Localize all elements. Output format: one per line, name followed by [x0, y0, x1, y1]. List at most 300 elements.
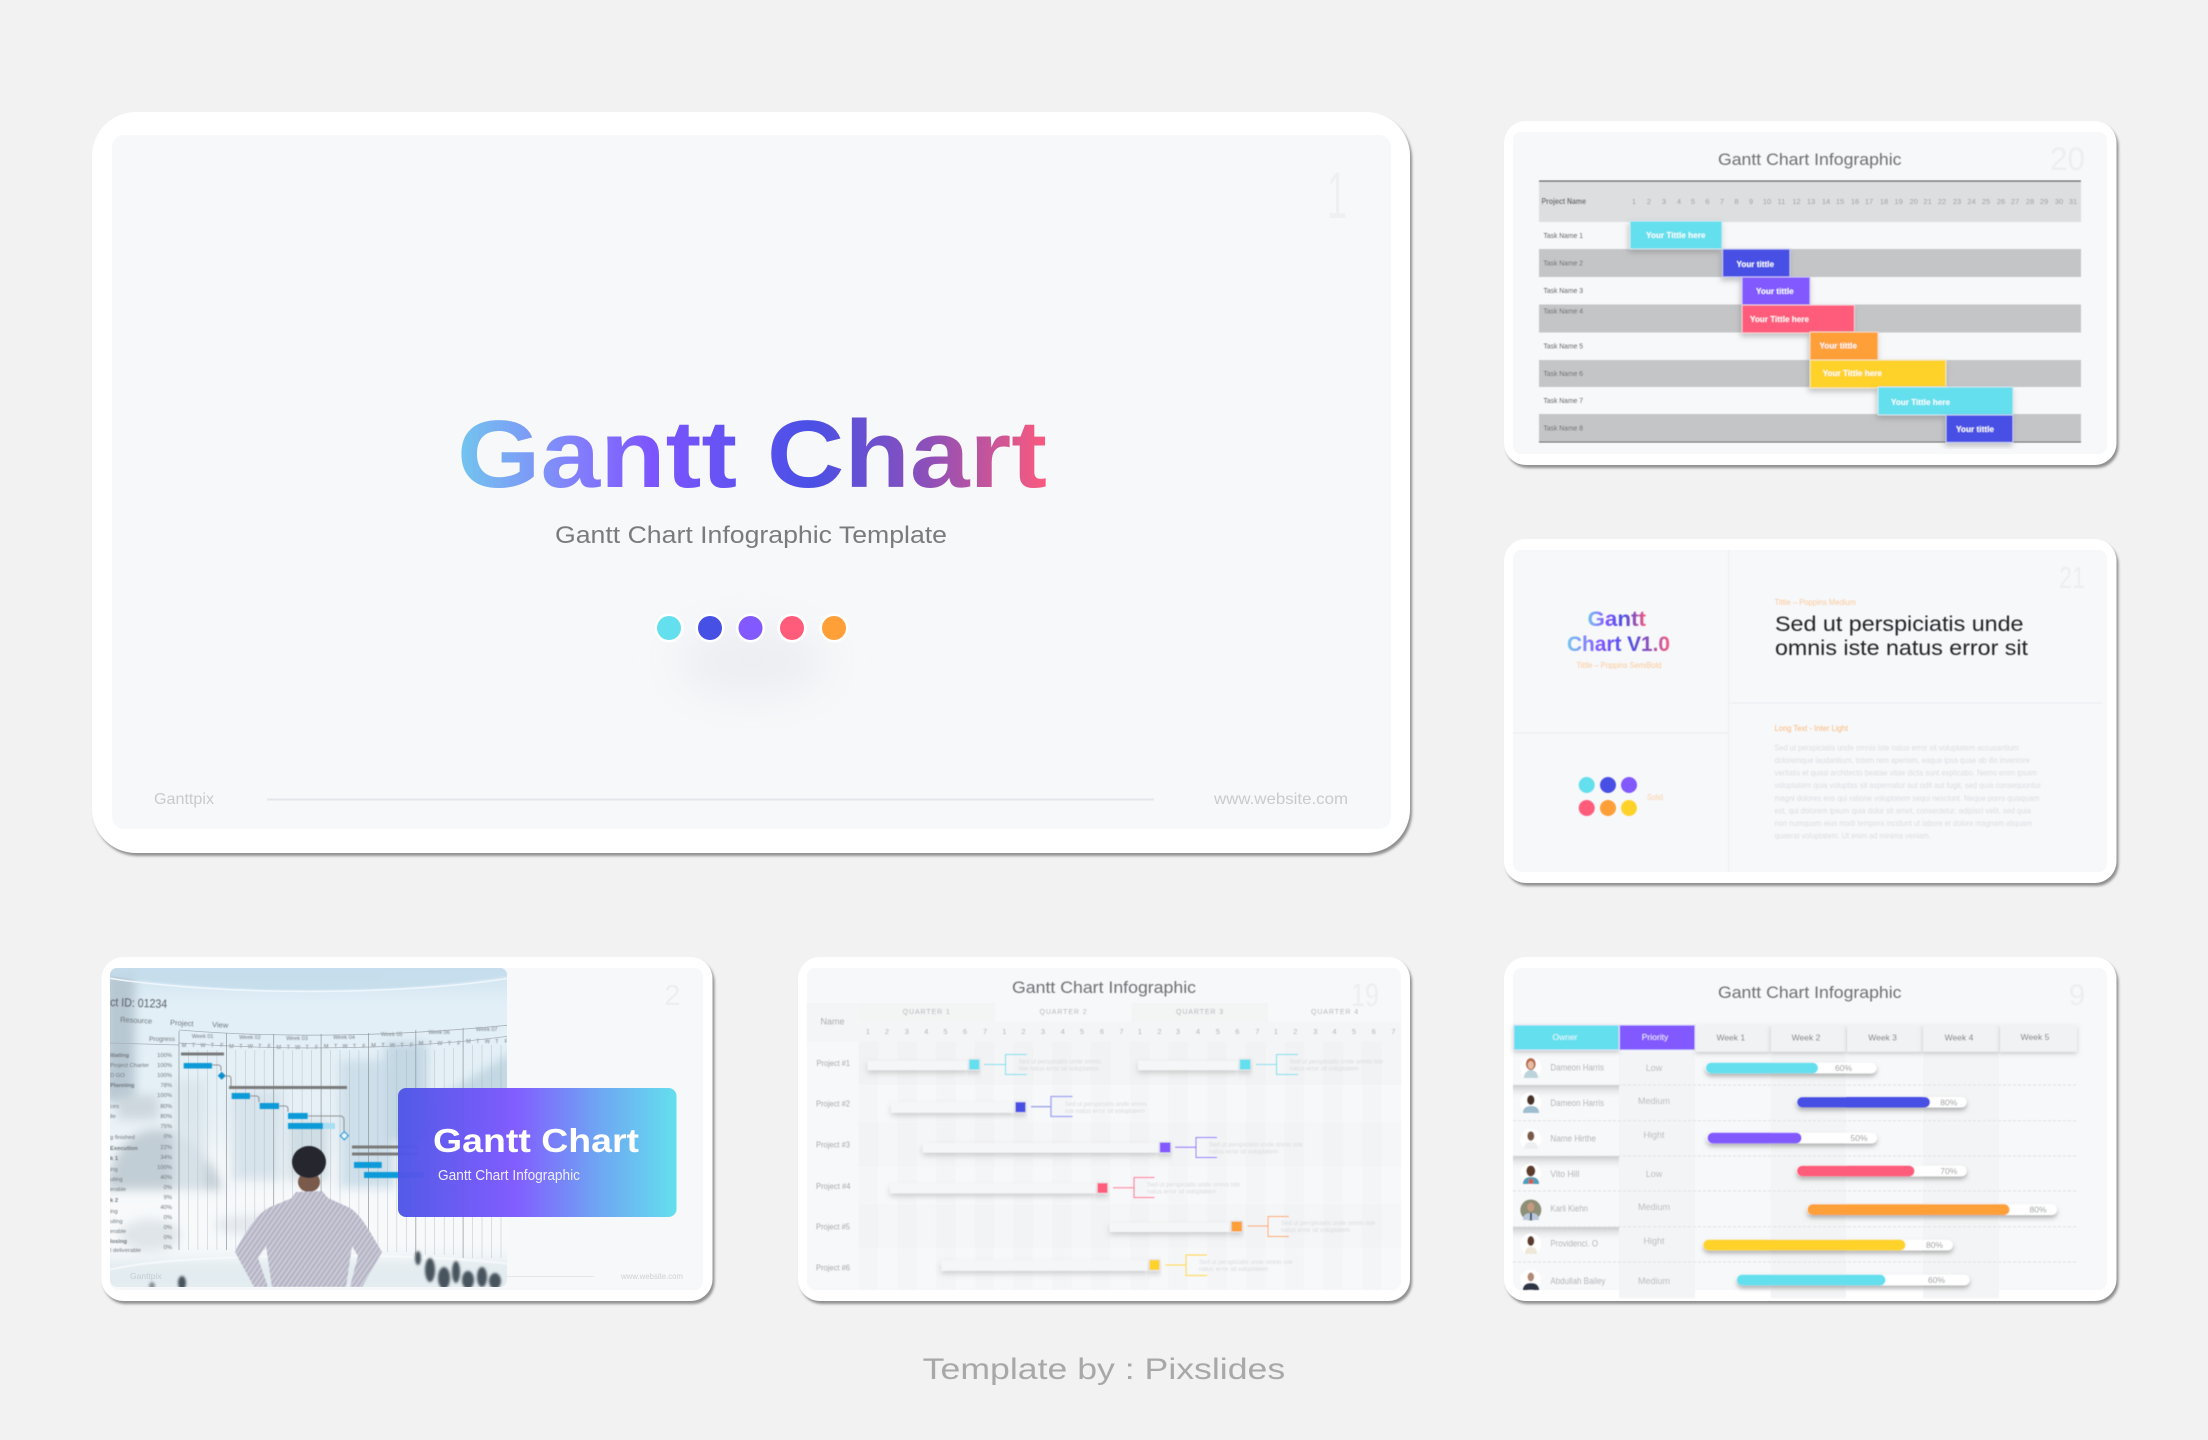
- box subtitle: Gantt Chart Infographic: [438, 1168, 580, 1184]
- table header: 16: [1851, 197, 1859, 206]
- priority labels: Medium: [1638, 1202, 1670, 1212]
- table header: 24: [1967, 197, 1976, 206]
- subtitle: Gantt Chart Infographic Template: [555, 522, 947, 549]
- gantt wall text: W: [200, 1043, 206, 1049]
- table header quarters: 2: [1293, 1027, 1297, 1036]
- table header quarters: 7: [1255, 1027, 1259, 1036]
- slide number 2: 2: [664, 980, 681, 1012]
- gantt wall text: 0%: [164, 1185, 172, 1191]
- task names: Task Name 5: [1544, 342, 1583, 350]
- gantt wall text: M: [466, 1039, 471, 1045]
- task names: Task Name 6: [1544, 369, 1583, 378]
- avatar 5: [1520, 1200, 1541, 1220]
- credit line: Template by : Pixslides: [923, 1353, 1285, 1386]
- table header quarters: 6: [963, 1027, 967, 1036]
- gantt wall text: losing: [110, 1239, 128, 1245]
- gantt wall text: 40%: [160, 1205, 172, 1211]
- project 4 timeline: Sed ut perspiciatis unde omnis iste: [1147, 1182, 1240, 1189]
- table header: 20: [1910, 197, 1918, 206]
- gantt wall text: 100%: [157, 1063, 172, 1069]
- table header quarters: QUARTER 3: [1176, 1009, 1224, 1016]
- heading: Gantt Chart Infographic: [1718, 151, 1902, 169]
- project 2 timeline: Sed ut perspiciatis unde omnis: [1065, 1101, 1147, 1108]
- avatar 7: [1520, 1270, 1541, 1290]
- table header: 14: [1822, 197, 1830, 206]
- panel: main title slide: [92, 112, 1410, 853]
- avatar 2: [1520, 1092, 1541, 1114]
- project 3 timeline: Sed ut perspiciatis unde omnis iste: [1209, 1142, 1303, 1149]
- main title: Gantt Chart: [457, 401, 1047, 508]
- table header: 21: [1923, 197, 1932, 206]
- footer brand: Ganttpix: [154, 791, 214, 808]
- gantt bars: Your Tittle here: [1646, 230, 1706, 240]
- photo footer text: Ganttpix: [130, 1271, 162, 1281]
- gantt wall text: 40%: [160, 1175, 172, 1181]
- table header quarters: 6: [1372, 1027, 1376, 1036]
- gantt wall text: l deliverable: [110, 1248, 141, 1254]
- table header: 15: [1836, 197, 1844, 206]
- gantt wall text: erable: [110, 1187, 126, 1193]
- project 6 timeline: Sed ut perspiciatis unde omnis iste: [1199, 1259, 1293, 1266]
- grey row bands: [1539, 249, 2081, 442]
- gantt bars: Your Tittle here: [1750, 314, 1809, 324]
- table header quarters: 3: [905, 1027, 909, 1036]
- bar 2: 80%: [1796, 1097, 1967, 1108]
- table header quarters: 7: [1119, 1027, 1123, 1036]
- table header: 30: [2055, 197, 2063, 206]
- priority labels: Low: [1646, 1063, 1663, 1073]
- slide number 19: 19: [1351, 977, 1379, 1013]
- table header: Week 1: [1716, 1032, 1745, 1042]
- project 3 timeline: natus error sit voluptatem: [1209, 1148, 1278, 1155]
- table header: 19: [1894, 197, 1903, 206]
- table header: 6: [1705, 197, 1710, 206]
- table header: 13: [1807, 197, 1815, 206]
- heading: Gantt Chart Infographic: [1718, 984, 1902, 1002]
- table header quarters: [807, 1003, 1401, 1042]
- owner names: [1550, 1063, 1606, 1286]
- gantt wall text: ing: [110, 1209, 118, 1215]
- slide number 21: 21: [2059, 560, 2085, 595]
- table header: 2: [1647, 197, 1651, 206]
- project 2 timeline: iste natus error sit voluptatem: [1065, 1108, 1145, 1115]
- gantt wall text: W: [248, 1044, 254, 1050]
- slide number 1: 1: [1327, 158, 1347, 232]
- swatch label: Solid: [1647, 792, 1663, 802]
- table header quarters: 5: [943, 1027, 948, 1036]
- logo caption: Tittle – Poppins SemiBold: [1576, 660, 1662, 670]
- slide number 20: 20: [2050, 141, 2085, 177]
- task names: Task Name 1: [1544, 231, 1583, 240]
- project labels: Project #3: [816, 1140, 850, 1150]
- panel: slide 20 gantt table: [1504, 121, 2116, 465]
- gantt bars: Your tittle: [1736, 259, 1774, 269]
- gantt wall text: T: [287, 1045, 291, 1051]
- project 6 timeline: [941, 1255, 1293, 1276]
- project labels: Project #4: [816, 1181, 851, 1191]
- gantt wall text: 100%: [157, 1073, 172, 1079]
- project labels: Project #5: [816, 1222, 850, 1232]
- project 1 timeline a: Sed ut perspiciatis unde omnis: [1019, 1059, 1101, 1066]
- gantt wall text: Week 05: [381, 1032, 403, 1038]
- gantt wall text: T: [476, 1039, 480, 1045]
- bar 1: 60%: 60%: [1835, 1063, 1852, 1073]
- top arc band: [110, 968, 507, 990]
- gantt bars: Your tittle: [1756, 286, 1794, 296]
- table header quarters: 3: [1041, 1027, 1045, 1036]
- project labels: Project #2: [816, 1098, 850, 1108]
- gantt bars: Your tittle: [1956, 424, 1994, 434]
- long text paragraph: veritatis et quasi architecto beatae vitae dicta sunt explicabo. Nemo enim ipsam: [1774, 768, 2037, 778]
- gradient title box: [398, 1088, 676, 1217]
- footer website: www.website.com: [1213, 791, 1348, 808]
- gradient logo title: Gantt: [1588, 608, 1646, 631]
- table header: 10: [1763, 197, 1771, 206]
- project 1 timeline a: [868, 1054, 1101, 1074]
- gradient logo title: [1567, 608, 1670, 656]
- table header: 3: [1662, 197, 1666, 206]
- owner names: Dameon Harris: [1550, 1063, 1604, 1073]
- gantt wall text: Resource: [120, 1015, 152, 1026]
- avatar 3: [1520, 1128, 1541, 1150]
- bar 3: 50%: 50%: [1850, 1133, 1868, 1143]
- long text paragraph: voluptatem quia voluptas sit aspernatur aut odit aut fugit, sed quia consequuntur: [1774, 780, 2041, 790]
- table header: 12: [1792, 197, 1801, 206]
- panel: slide 21 style guide: [1504, 539, 2116, 883]
- gantt wall text: W: [390, 1043, 396, 1049]
- table header quarters: 5: [1216, 1027, 1220, 1036]
- table header: 18: [1880, 197, 1888, 206]
- table header quarters: QUARTER 1: [903, 1009, 951, 1016]
- table header: 29: [2040, 197, 2048, 206]
- gantt wall text: W: [342, 1044, 348, 1050]
- gantt wall text: M: [277, 1045, 282, 1051]
- owner avatars: [1520, 1058, 1541, 1290]
- gantt wall text: 80%: [160, 1114, 172, 1120]
- bar 6: 80%: [1704, 1240, 1953, 1250]
- colour swatches: [1579, 777, 1637, 816]
- project 1 timeline b: natus error sit voluptatem: [1290, 1066, 1359, 1072]
- long text paragraph: [1774, 743, 2041, 841]
- bar 5: 80%: 80%: [2029, 1204, 2047, 1214]
- gantt bars: Your Tittle here: [1891, 397, 1950, 407]
- long text caption: Long Text - Inter Light: [1774, 723, 1849, 733]
- bar 4: 70%: [1796, 1166, 1967, 1176]
- table header: Priority: [1642, 1032, 1669, 1042]
- table header: 9: [1749, 197, 1753, 206]
- project labels: Project #1: [816, 1058, 850, 1068]
- table header: Week 5: [2021, 1032, 2050, 1042]
- table header: 11: [1778, 197, 1785, 206]
- priority labels: Hight: [1643, 1130, 1665, 1140]
- gantt wall text: ct ID: 01234: [110, 995, 168, 1011]
- panel: slide 9 owner and priority gantt: [1504, 957, 2116, 1301]
- sample heading: Sed ut perspiciatis unde: [1775, 613, 2024, 636]
- gantt wall text: Project Charter: [110, 1063, 149, 1069]
- table header quarters: 5: [1352, 1027, 1356, 1036]
- colour dots with soft shadow: [654, 614, 848, 698]
- gantt wall text: M: [371, 1043, 376, 1049]
- gantt wall text: W: [295, 1045, 301, 1051]
- long text paragraph: quaerat voluptatem. Ut enim ad minima veniam.: [1774, 831, 1931, 841]
- gantt wall text: T: [381, 1043, 385, 1049]
- gantt bars: [1630, 221, 2013, 442]
- gantt wall text: M: [182, 1043, 187, 1049]
- table header quarters: 1: [866, 1027, 870, 1036]
- project 1 timeline b: Sed ut perspiciatis unde omnis iste: [1290, 1059, 1384, 1066]
- table header: 5: [1691, 197, 1695, 206]
- table header quarters: 3: [1313, 1027, 1317, 1036]
- owner names: Vito Hill: [1550, 1169, 1579, 1179]
- gantt wall text: 9%: [164, 1195, 172, 1201]
- gantt wall text: Week 02: [239, 1035, 261, 1041]
- table header quarters: 4: [1332, 1027, 1337, 1036]
- owner names: Abdullah Bailey: [1550, 1276, 1606, 1286]
- bar 7: 60%: 60%: [1928, 1275, 1945, 1285]
- gantt wall text: ing: [110, 1167, 118, 1173]
- photo background buildings: [100, 972, 520, 1292]
- gantt wall text: itiating: [110, 1053, 129, 1059]
- gantt wall text: Progress: [149, 1036, 176, 1043]
- table header: Week 3: [1868, 1032, 1897, 1042]
- owner names: Karli Kiehn: [1550, 1204, 1588, 1214]
- table header quarters: 7: [1391, 1027, 1395, 1036]
- gantt wall text: T: [448, 1041, 452, 1047]
- gantt wall text: 75%: [160, 1124, 172, 1130]
- project labels: [816, 1058, 851, 1272]
- gantt wall text: uting: [110, 1219, 123, 1225]
- table header: 4: [1677, 197, 1681, 206]
- long text paragraph: doloremque laudantium, totam rem aperiam, eaque ipsa quae ab illo inventore: [1774, 755, 2030, 765]
- gantt wall text: M: [229, 1044, 234, 1050]
- table header: Week 2: [1792, 1032, 1821, 1042]
- heading caption: Tittle – Poppins Medium: [1774, 597, 1856, 607]
- bar 7: 60%: [1737, 1275, 1970, 1285]
- gantt wall text: 0%: [164, 1134, 172, 1140]
- gantt bars: Your Tittle here: [1823, 368, 1882, 378]
- table header quarters: 6: [1235, 1027, 1239, 1036]
- table header quarters: QUARTER 4: [1311, 1009, 1359, 1016]
- table header: 1: [1632, 197, 1636, 206]
- table header quarters: 1: [1138, 1027, 1142, 1036]
- project 4 timeline: natus error sit voluptatem: [1147, 1188, 1216, 1195]
- table header quarters: 5: [1080, 1027, 1084, 1036]
- gantt wall text: 100%: [157, 1053, 172, 1059]
- priority labels: Medium: [1638, 1096, 1670, 1106]
- table header quarters: 1: [1274, 1027, 1278, 1036]
- gantt wall text: 80%: [160, 1104, 172, 1110]
- progress bars: [1704, 1063, 2057, 1285]
- bar 6: 80%: 80%: [1926, 1240, 1943, 1250]
- project 4 timeline: [890, 1178, 1240, 1198]
- gantt wall text: g finished: [110, 1135, 135, 1141]
- priority labels: Hight: [1643, 1236, 1665, 1246]
- column stripes: [1619, 1052, 1999, 1298]
- table header quarters: Name: [820, 1016, 845, 1026]
- table header: 27: [2011, 197, 2019, 206]
- table header: [1514, 1025, 2077, 1052]
- panel: slide 19 quarterly gantt: [798, 957, 1410, 1301]
- table header quarters: 2: [1021, 1027, 1026, 1036]
- priority labels: [1638, 1063, 1670, 1286]
- gantt wall text: F: [410, 1043, 414, 1049]
- bar 4: 70%: 70%: [1940, 1166, 1958, 1176]
- gantt wall text: T: [495, 1039, 499, 1045]
- gantt wall text: T: [258, 1044, 262, 1050]
- gantt wall text: W: [437, 1041, 443, 1047]
- project 3 timeline: [923, 1138, 1303, 1158]
- gantt wall text: F: [268, 1044, 272, 1050]
- gantt wall text: M: [419, 1041, 424, 1047]
- task names: Task Name 2: [1544, 258, 1583, 268]
- table header quarters: 4: [1196, 1027, 1200, 1036]
- gantt wall text: T: [239, 1044, 243, 1050]
- table header quarters: 2: [885, 1027, 889, 1036]
- gantt wall text: F: [315, 1045, 319, 1051]
- table header: 28: [2026, 197, 2034, 206]
- project 1 timeline a: iste natus error sit voluptatem: [1019, 1066, 1099, 1072]
- gantt wall text: F: [362, 1044, 366, 1050]
- task names: Task Name 3: [1544, 286, 1583, 295]
- table header: Week 4: [1945, 1032, 1974, 1042]
- project 2 timeline: [891, 1096, 1147, 1116]
- sample heading: [1775, 613, 2028, 660]
- gantt wall text: T: [334, 1044, 338, 1050]
- gantt wall bars: [181, 1052, 424, 1178]
- row shadows and separators: [1513, 1085, 2076, 1262]
- project 1 timeline b: [1138, 1054, 1384, 1074]
- gantt wall text: 22%: [160, 1145, 172, 1151]
- table header: 7: [1720, 197, 1724, 206]
- gantt wall text: uting: [110, 1177, 123, 1183]
- slide number 9: 9: [2069, 979, 2085, 1012]
- avatar 4: [1520, 1164, 1541, 1184]
- avatar 1: [1520, 1058, 1541, 1078]
- gantt wall text: View: [212, 1020, 229, 1030]
- table header quarters: 1: [1002, 1027, 1006, 1036]
- table header quarters: 6: [1100, 1027, 1104, 1036]
- gantt wall text: Week 06: [428, 1030, 450, 1036]
- gantt wall text: T: [429, 1041, 433, 1047]
- table header quarters: QUARTER 2: [1039, 1009, 1088, 1016]
- gantt wall text: Week 04: [333, 1035, 355, 1041]
- gantt wall text: 100%: [157, 1093, 172, 1099]
- gantt wall text: Execution: [110, 1146, 138, 1152]
- gantt wall text: 100%: [157, 1165, 172, 1171]
- long text paragraph: magni dolores eos qui ratione voluptatem sequi nesciunt. Neque porro quisquam: [1774, 793, 2040, 803]
- bar 2: 80%: 80%: [1940, 1098, 1958, 1108]
- crowd in the distance: [149, 1251, 501, 1290]
- gantt wall text: 34%: [160, 1155, 172, 1161]
- table header: [1539, 180, 2081, 222]
- gantt wall text: Planning: [110, 1083, 135, 1089]
- gantt wall text: 0%: [164, 1245, 172, 1251]
- gantt wall text: Week 03: [286, 1036, 308, 1042]
- gantt wall text: k 2: [110, 1198, 118, 1204]
- gantt wall text: T: [306, 1045, 310, 1051]
- table header quarters: 3: [1176, 1027, 1180, 1036]
- gantt wall text: D GO: [110, 1073, 125, 1079]
- task names: [1544, 231, 1583, 432]
- bar 1: 60%: [1706, 1063, 1876, 1073]
- gantt wall text: F: [505, 1039, 509, 1045]
- bar 5: 80%: [1807, 1204, 2057, 1215]
- gantt wall text: Project: [170, 1018, 195, 1028]
- project labels: Project #6: [816, 1262, 850, 1272]
- project 5 timeline: Sed ut perspiciatis unde omnis iste: [1281, 1220, 1375, 1227]
- gantt wall text: k 1: [110, 1156, 119, 1162]
- table header: Project Name: [1542, 197, 1586, 206]
- gantt wall text: erable: [110, 1229, 126, 1235]
- gantt wall text: T: [192, 1043, 196, 1049]
- table header: 8: [1734, 197, 1739, 206]
- task names: Task Name 8: [1544, 424, 1583, 432]
- gantt wall text: ces: [110, 1104, 119, 1110]
- table header: 22: [1938, 197, 1946, 206]
- photo: man looking at gantt wall: [100, 965, 520, 1292]
- project 5 timeline: natus error sit voluptatem: [1281, 1227, 1350, 1234]
- table header: 31: [2069, 197, 2077, 206]
- table header: Owner: [1552, 1032, 1578, 1042]
- gradient logo title: Chart V1.0: [1567, 633, 1670, 656]
- gantt wall text: M: [324, 1044, 329, 1050]
- panel: slide 2 photo cover: [100, 957, 712, 1301]
- task names: Task Name 4: [1544, 306, 1583, 316]
- gantt wall text: T: [353, 1044, 357, 1050]
- table header: 17: [1865, 197, 1873, 206]
- table header: 23: [1953, 197, 1961, 206]
- gantt wall text: 0%: [164, 1235, 172, 1241]
- gantt wall text: [110, 995, 509, 1254]
- gantt wall text: F: [457, 1041, 461, 1047]
- owner names: Providenci. O: [1550, 1238, 1598, 1248]
- table header quarters: 2: [1157, 1027, 1161, 1036]
- box title: Gantt Chart: [433, 1122, 639, 1159]
- avatar 6: [1520, 1234, 1541, 1254]
- project 6 timeline: natus error sit voluptatem: [1199, 1266, 1268, 1273]
- gantt wall grid: [110, 1025, 510, 1258]
- gantt wall text: 78%: [160, 1083, 172, 1089]
- table header quarters: 4: [924, 1027, 928, 1036]
- heading: Gantt Chart Infographic: [1012, 979, 1196, 997]
- sample heading: omnis iste natus error sit: [1775, 637, 2028, 660]
- owner names: Dameon Harris: [1550, 1098, 1604, 1108]
- man seen from behind: [235, 1146, 382, 1287]
- owner names: Name Hirthe: [1550, 1133, 1596, 1143]
- gantt wall text: 0%: [164, 1225, 172, 1231]
- row and column stripes: [859, 1042, 1401, 1290]
- gantt wall text: Week 07: [476, 1027, 498, 1033]
- long text paragraph: Sed ut perspiciatis unde omnis iste natus error sit voluptatem accusantium: [1774, 743, 2019, 753]
- gantt wall text: ile: [110, 1114, 116, 1120]
- bar 3: 50%: [1707, 1133, 1877, 1143]
- table header quarters: 4: [1061, 1027, 1065, 1036]
- project 5 timeline: [1110, 1216, 1375, 1236]
- table header quarters: 7: [983, 1027, 987, 1036]
- table header: 26: [1997, 197, 2005, 206]
- long text paragraph: non numquam eius modi tempora incidunt ut labore et dolore magnam aliquam: [1774, 818, 2032, 828]
- priority labels: Low: [1646, 1169, 1663, 1179]
- footer website: www.website.com: [620, 1271, 683, 1281]
- task names: Task Name 7: [1544, 396, 1583, 405]
- gantt wall text: Week 01: [192, 1034, 214, 1040]
- long text paragraph: est, qui dolorem ipsum quia dolor sit amet, consectetur, adipisci velit, sed quia: [1774, 806, 2031, 816]
- table header: 25: [1982, 197, 1990, 206]
- gantt wall text: T: [400, 1043, 404, 1049]
- gantt wall text: F: [220, 1043, 224, 1049]
- gantt wall text: 0%: [164, 1215, 172, 1221]
- priority labels: Medium: [1638, 1276, 1670, 1286]
